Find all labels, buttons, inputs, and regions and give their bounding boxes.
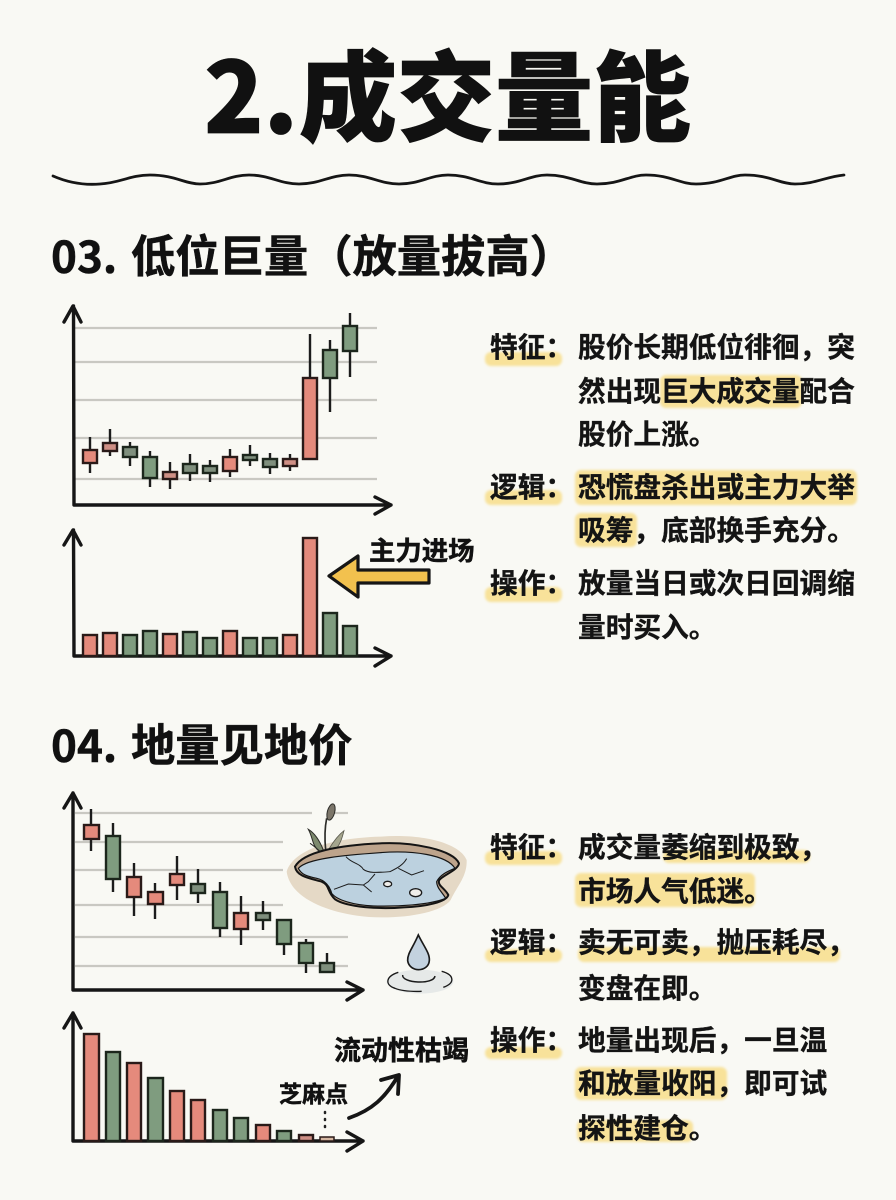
- text block: section 04: 操作：: [490, 1018, 573, 1058]
- text block: section 04: 和放量收阳，即可试: [578, 1061, 828, 1101]
- title: 2.: [204, 20, 298, 162]
- icon: water drop with ripples: [387, 935, 453, 994]
- volume bars: [84, 1034, 334, 1141]
- text block: section 03: 然出现巨大成交量配合: [578, 369, 855, 409]
- text block: section 03: 吸筹，底部换手充分。: [578, 508, 855, 548]
- volume chart: 低位巨量: [64, 530, 391, 666]
- arrow: 主力进场: [329, 556, 429, 597]
- candlestick chart: 低位巨量: [64, 306, 391, 514]
- text block: section 04: 变盘在即。: [578, 966, 716, 1006]
- heading: section 03: 03.: [51, 222, 117, 286]
- volume chart: 地量见地价: [64, 1013, 363, 1151]
- text block: section 04: 地量出现后，一旦温: [578, 1018, 827, 1058]
- label: 主力进场: 主力进场: [369, 529, 475, 568]
- axes: [64, 306, 391, 514]
- text block: section 03: [485, 325, 857, 645]
- text block: section 04: 成交量萎缩到极致，: [578, 825, 827, 865]
- text block: section 03: 量时买入。: [578, 605, 716, 645]
- highlights: [485, 352, 857, 602]
- heading: section 04: 地量见地价: [131, 710, 352, 774]
- text block: section 03: 操作：: [490, 561, 573, 601]
- heading: section 03: 低位巨量（放量拔高）: [131, 221, 574, 285]
- dotted leader: [324, 1112, 326, 1129]
- text block: section 03: 特征：: [490, 325, 573, 365]
- volume axes: [64, 530, 391, 666]
- highlights: [485, 850, 840, 1142]
- volume bars: [83, 538, 357, 656]
- axes: [64, 793, 363, 1000]
- arrow: curved up: [349, 1075, 399, 1118]
- text block: section 03: 逻辑：: [490, 465, 573, 505]
- text block: section 03: 放量当日或次日回调缩: [578, 561, 855, 601]
- text block: section 03: 恐慌盘杀出或主力大举: [578, 465, 855, 505]
- title: 成交量能: [299, 20, 691, 162]
- text block: section 04: 卖无可卖，抛压耗尽，: [578, 920, 855, 960]
- volume axes: [64, 1013, 363, 1151]
- text block: section 03: 股价上涨。: [578, 412, 716, 452]
- text block: section 04: [485, 825, 855, 1146]
- heading: section 04: 04.: [51, 711, 117, 775]
- text block: section 04: 逻辑：: [490, 920, 573, 960]
- text block: section 04: 探性建仓。: [578, 1106, 716, 1146]
- candles: [84, 809, 334, 973]
- icon: dried cracked pond: [287, 803, 467, 917]
- label: 芝麻点: 芝麻点: [279, 1075, 348, 1109]
- candles: [83, 313, 357, 489]
- text block: section 04: 特征：: [490, 825, 573, 865]
- text block: section 04: 市场人气低迷。: [578, 869, 772, 909]
- text block: section 03: 股价长期低位徘徊，突: [578, 325, 855, 365]
- candlestick chart: 地量见地价: [64, 793, 363, 1000]
- label: 流动性枯竭: 流动性枯竭: [334, 1029, 469, 1068]
